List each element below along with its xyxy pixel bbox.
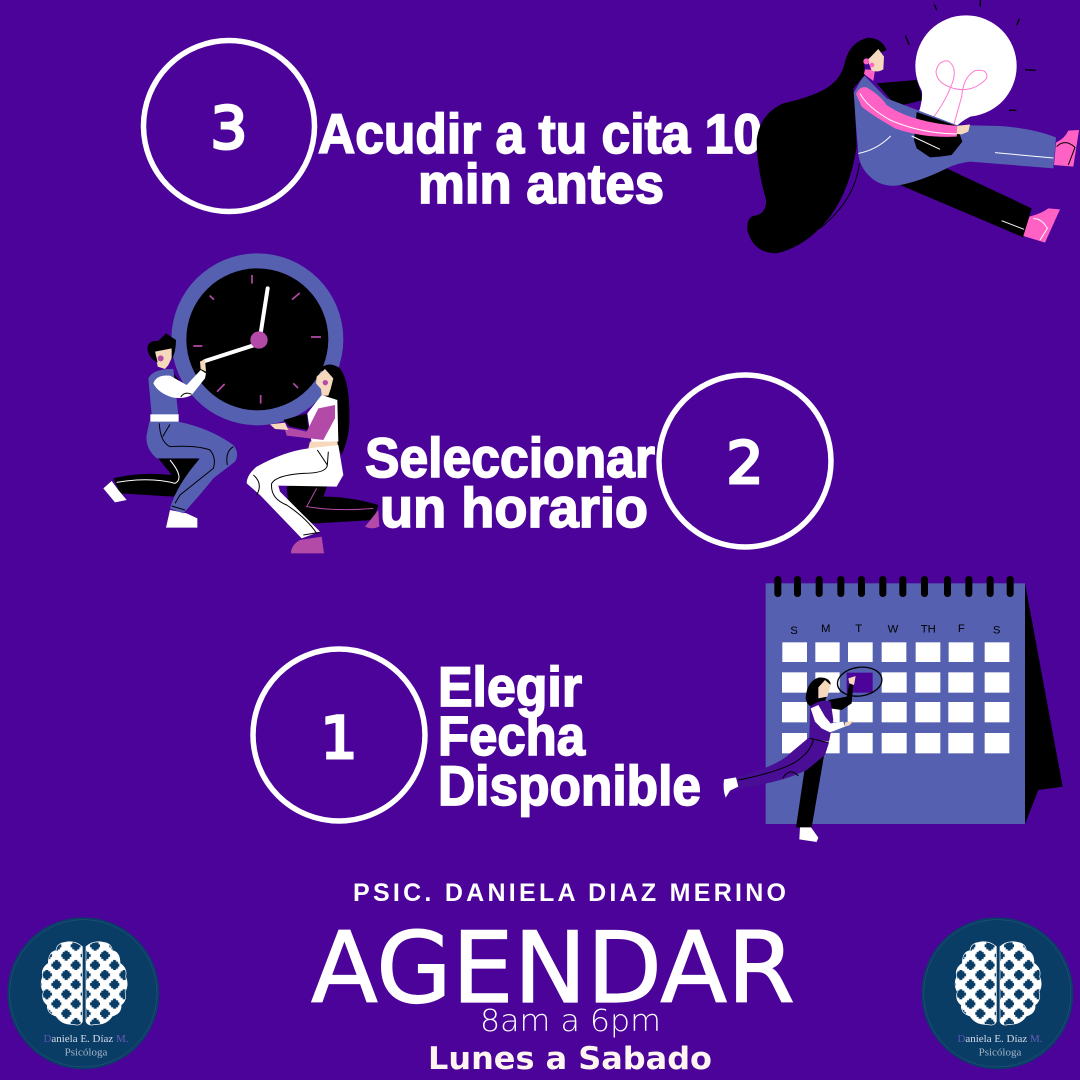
back leg [113,458,200,497]
shoe [291,537,324,553]
torso [307,395,338,443]
step 1 text: Elegir [438,655,582,718]
logo left: Psicóloga [65,1046,107,1058]
logo right: Psicóloga [979,1046,1021,1058]
clock [171,253,343,425]
front shoe [1054,130,1079,167]
step 1 text: Fecha [438,704,586,767]
clock hands [205,288,268,361]
step 2 text: un horario [380,476,648,539]
weekday labels: S [993,625,1001,637]
back arm [283,413,308,430]
weekday labels: TH [921,623,936,635]
pants [146,422,237,513]
hand [957,124,970,134]
shoe [724,777,738,798]
step 3 number circle [144,40,314,212]
step 1 text: Disponible [438,754,701,817]
days: Lunes a Sabado [428,1041,712,1077]
weekday labels: T [855,623,862,635]
pants [737,737,829,789]
calendar stand [1025,583,1063,824]
step 2 number circle [659,375,831,547]
face [155,347,172,369]
back leg [287,478,378,523]
back shoe [1023,208,1060,243]
raised arm [828,683,853,710]
bulb rays [905,0,1036,110]
pants [247,445,343,538]
standing leg [796,750,825,827]
date cells [782,642,1009,753]
face [316,369,333,396]
person left [103,333,237,528]
weekday labels: W [888,624,899,636]
neck and face [863,49,884,81]
bulb base [914,112,962,157]
front shoe [166,510,197,528]
hair [147,333,176,362]
presenter name: PSIC. DANIELA DIAZ MERINO [353,879,786,907]
sleeve [153,370,206,398]
step 2 text: Seleccionar [365,426,655,489]
torso [809,701,833,742]
clock ticks [193,275,321,404]
sleeve [284,405,335,440]
face [818,680,831,698]
logo right [921,917,1073,1069]
spiral rings [774,576,1014,597]
step 2 number circle: 2 [727,429,763,497]
step 3 text: Acudir a tu cita 10 [318,102,762,165]
back arm [877,80,923,107]
bulb [915,15,1017,126]
weekday labels: M [821,623,830,635]
hair [747,38,887,253]
woman on calendar [724,676,856,842]
illustration: two people holding clock [103,253,379,553]
illustration: calendar with woman [724,576,1063,842]
hair [806,678,831,707]
sleeve [811,705,845,732]
hours: 8am a 6pm [480,1004,661,1039]
torso [148,369,178,415]
logo left [7,917,159,1069]
brain [41,942,127,1025]
selected date [836,664,884,699]
step 1 number circle: 1 [321,704,357,772]
illustration: woman holding light bulb [747,0,1079,253]
step 1 number circle [253,649,425,821]
weekday labels [790,623,1001,637]
logo text: Daniela E. Díaz M. [957,1033,1043,1045]
step 3 text: min antes [418,152,664,215]
step 3 text [318,102,762,215]
calendar page [766,583,1025,824]
step 1 text [438,655,701,817]
back arm [173,373,183,392]
front leg and torso [853,75,1056,186]
weekday labels: S [790,625,798,637]
main heading: AGENDAR [311,912,795,1026]
person right [247,365,379,553]
pink sleeve [856,87,958,137]
hair [318,365,349,455]
step 3 number circle: 3 [211,94,247,162]
logo text: Daniela E. Díaz M. [43,1033,129,1045]
weekday labels: F [958,623,965,635]
brain [955,942,1041,1025]
clothing lines [858,136,1053,158]
back leg [900,168,1032,237]
step 2 text [365,426,655,539]
